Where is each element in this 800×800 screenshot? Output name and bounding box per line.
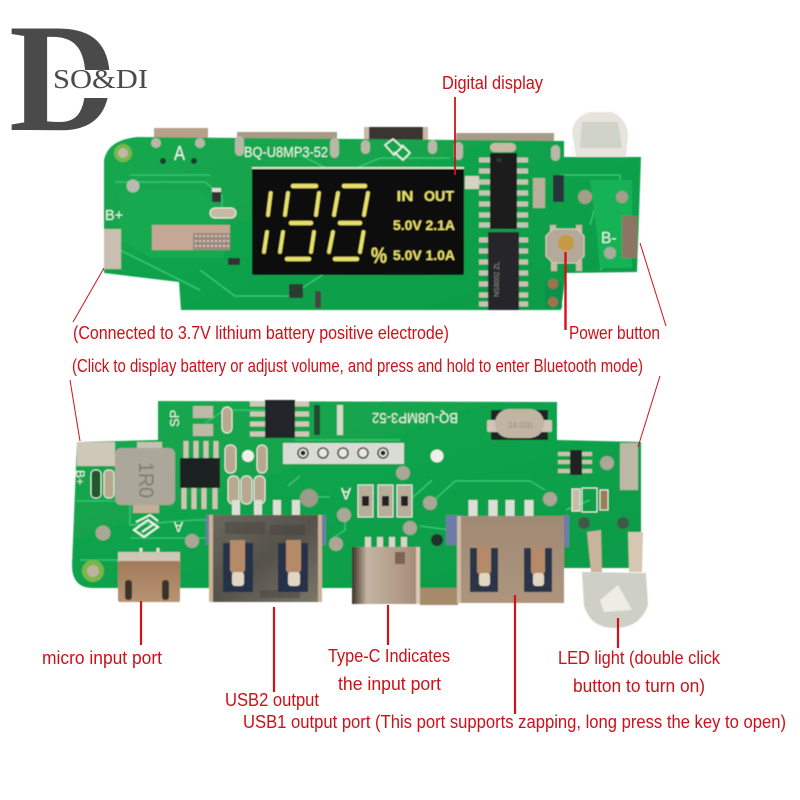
small parts on top board [210,143,564,308]
LED lens and legs [578,517,648,628]
silk labels on bottom board: B- [617,472,633,486]
LED resistors row [358,485,412,517]
arrow: Type-C leader [387,605,389,645]
label: Type-C input [328,646,450,694]
copper traces [115,155,632,296]
silk labels on bottom board: A [340,484,351,503]
label: micro input port: micro input port [42,648,162,668]
chip: lower IC with pins [479,232,528,310]
silk labels on top board: B- [601,230,616,247]
PCB outline [72,401,641,588]
B+ pad and label [73,442,115,485]
arrow: power button leader [564,252,567,330]
arrow: USB2 leader [273,607,275,692]
silk labels on top board [105,139,616,247]
label: button instructions: (Click to display battery or adjust volume, and press and hold to enter Bluetooth mode) [72,356,643,376]
B+ pad [104,229,121,269]
label: LED light [558,648,721,696]
bottom board: connector side of PCB [72,400,648,628]
white header strip with holes [283,443,404,464]
display: status text: 5.0V 2.1A [393,217,455,233]
display: status text [371,189,455,268]
label: Type-C input: the input port [338,674,441,694]
arrow: B- lower leader [638,376,660,447]
silk labels on top board: BQ-U8MP3-52 [244,145,328,161]
small components centre-left [222,405,343,504]
USB2 output connector [206,500,326,602]
crystal oscillator: 24.000 [508,421,533,430]
LED lens at top right [572,112,628,157]
B+ pad and label: B+ [73,470,87,485]
top board: display side of PCB [104,112,641,310]
small resistors beside B+ [91,470,114,498]
B- pad [622,216,637,258]
label: USB2 output: USB2 output [225,690,319,710]
arrow: B- upper leader [640,243,666,326]
arrow: digital display leader [454,97,456,175]
chip: upper IC with pins [479,153,528,229]
copper strip and vias [152,225,230,250]
arrow: micro input leader [140,601,142,645]
connector tabs on top edge [154,127,554,141]
inductor 1R0: 1R0 [134,462,157,498]
silk labels on top board: A [174,143,186,165]
label: LED light: button to turn on) [573,676,705,696]
power button [546,225,584,271]
silk labels on top board: B+ [105,208,123,224]
silk labels on bottom board: A [174,518,183,535]
micro USB input connector [118,548,180,602]
label: LED light: LED light (double click [558,648,721,668]
arrow: B+ upper leader [73,268,104,322]
holes and pads on bottom board [82,450,614,582]
display: status text: OUT [424,189,454,205]
digital display module [252,167,464,275]
crystal oscillator [487,409,552,440]
PCB outline [104,137,641,310]
IC by inductor [180,441,220,509]
USB1 output connector [446,500,569,603]
silk labels on bottom board: BQ-U8MP3-52 [372,409,458,425]
Type-C connector [352,537,458,605]
display: status text: % [371,243,387,268]
display: status text: IN [396,189,414,205]
SP pads and label [167,406,213,436]
silk labels on bottom board [134,409,633,537]
copper traces [76,410,590,560]
SOP8 IC near SP pads [250,400,309,438]
arrow: USB1 leader [514,595,516,714]
label: battery positive: (Connected to 3.7V lithium battery positive electrode) [73,323,449,343]
small IC and B- pad [558,443,638,512]
arrow: B+ lower leader [70,380,80,441]
display: digit segments [264,186,368,259]
SP pads and label: SP [167,410,182,427]
label: digital display: Digital display [442,73,543,93]
display: status text: 5.0V 1.0A [393,247,455,263]
mounting holes and pads [114,136,628,259]
arrow: LED leader [617,618,619,648]
label: power button: Power button [569,323,660,343]
chip: lower IC with pins: NS8002 ZL [494,261,501,297]
label: Type-C input: Type-C Indicates [328,646,450,666]
inductor 1R0 [115,442,175,513]
logo: DSO&DI: SO&DI [53,64,148,94]
